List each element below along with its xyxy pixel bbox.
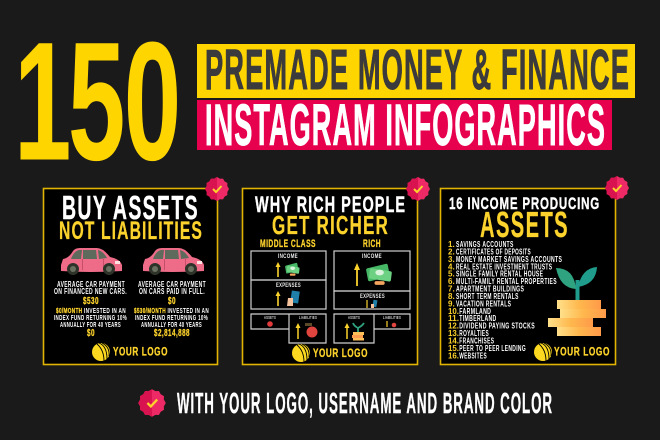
list of assets: 7. bbox=[448, 284, 455, 294]
panel title bbox=[59, 189, 203, 245]
icon: badge one bbox=[205, 177, 229, 201]
text: paid in full column: INDEX FUND RETURNING 10% bbox=[135, 315, 208, 322]
chart: middle class assets and liabilities bbox=[251, 314, 326, 343]
logo bbox=[292, 344, 368, 362]
panel title: WHY RICH PEOPLE bbox=[255, 192, 406, 217]
chart: rich income and expenses: EXPENSES bbox=[360, 293, 385, 300]
panel: why rich people get richer bbox=[242, 188, 418, 364]
logo: YOUR LOGO bbox=[313, 348, 368, 360]
text: financed car column: INDEX FUND RETURNING 10% bbox=[54, 315, 127, 322]
chart: middle class income and expenses: INCOME bbox=[278, 253, 298, 260]
list of assets: 6. bbox=[448, 277, 455, 286]
list of assets: WEBSITES bbox=[459, 351, 487, 360]
text: paid in full column: $530/MONTH INVESTED IN AN bbox=[134, 308, 209, 315]
text: financed car column bbox=[54, 280, 127, 339]
list of assets: CERTIFICATES OF DEPOSITS bbox=[456, 247, 531, 256]
text: financed car column: ANNUALLY FOR 40 YEARS bbox=[60, 322, 121, 329]
list of assets: 15. bbox=[448, 344, 459, 353]
list of assets: DIVIDEND PAYING STOCKS bbox=[459, 322, 535, 331]
chart: middle class income and expenses bbox=[251, 251, 326, 309]
text: paid in full column: $0 bbox=[168, 296, 176, 307]
text: paid in full column: ON CARS PAID IN FULL. bbox=[139, 287, 205, 296]
text: financed car column: $530 bbox=[83, 296, 99, 307]
list of assets: 2. bbox=[448, 247, 455, 256]
list of assets: 9. bbox=[448, 299, 455, 308]
list of assets: ROYALTIES bbox=[459, 329, 489, 338]
icon: plant growing from coins bbox=[548, 267, 606, 336]
chart: rich income and expenses: INCOME bbox=[362, 253, 382, 260]
list of assets: 11. bbox=[448, 314, 459, 323]
list of assets: 12. bbox=[448, 322, 459, 331]
text: paid in full column: $2,814,888 bbox=[154, 328, 190, 339]
text: financed car column: $0 bbox=[87, 328, 95, 339]
icon: badge three bbox=[605, 176, 629, 200]
list of assets: MONEY MARKET SAVINGS ACCOUNTS bbox=[456, 255, 562, 264]
text: paid in full column: ANNUALLY FOR 40 YEARS bbox=[141, 322, 202, 329]
list of assets: SHORT TERM RENTALS bbox=[456, 292, 519, 301]
list of assets: VACATION RENTALS bbox=[456, 299, 511, 308]
list of assets: 4. bbox=[448, 262, 455, 271]
icon: car left bbox=[61, 248, 122, 275]
list of assets: 10. bbox=[448, 307, 459, 316]
chart: middle class assets and liabilities: LIABILITIES bbox=[299, 315, 317, 320]
logo bbox=[92, 343, 168, 361]
list of assets: 16. bbox=[448, 351, 459, 360]
logo bbox=[534, 343, 610, 361]
list of assets: PEER TO PEER LENDING bbox=[459, 344, 526, 353]
panel title: BUY ASSETS bbox=[62, 189, 199, 226]
panel title bbox=[449, 194, 600, 245]
chart: rich income and expenses bbox=[334, 251, 410, 309]
text: financed car column: $0/MONTH INVESTED IN AN bbox=[56, 308, 126, 315]
logo: YOUR LOGO bbox=[554, 346, 610, 358]
big number 150: 150 bbox=[14, 6, 181, 196]
list of assets: 14. bbox=[448, 336, 459, 346]
list of assets: 3. bbox=[448, 255, 455, 264]
list of assets: SAVINGS ACCOUNTS bbox=[456, 240, 514, 249]
list of assets: 1. bbox=[448, 240, 455, 249]
chart: rich assets and liabilities: LIABILITIES bbox=[383, 315, 401, 320]
list of assets: FRANCHISES bbox=[459, 336, 494, 346]
panel title: GET RICHER bbox=[272, 210, 389, 240]
icon: car right bbox=[143, 248, 204, 275]
chart: middle class assets and liabilities: ASSETS bbox=[264, 315, 276, 320]
text: financed car column: ON FINANCED NEW CARS. bbox=[54, 287, 127, 296]
panel title bbox=[255, 192, 406, 240]
list of assets: TIMBERLAND bbox=[459, 314, 497, 323]
panel: buy assets not liabilities bbox=[44, 188, 218, 364]
text: paid in full column bbox=[134, 280, 209, 339]
chart: middle class income and expenses: EXPENSES bbox=[276, 282, 301, 289]
list of assets: REAL ESTATE INVESTMENT TRUSTS bbox=[456, 262, 552, 271]
text: financed car column: AVERAGE CAR PAYMENT bbox=[57, 280, 125, 289]
column heading: rich: RICH bbox=[363, 238, 381, 250]
chart: rich assets and liabilities bbox=[334, 314, 410, 343]
icon: badge two bbox=[406, 177, 430, 201]
panel title: NOT LIABILITIES bbox=[59, 217, 203, 245]
list of assets: 5. bbox=[448, 270, 455, 279]
chart: rich assets and liabilities: ASSETS bbox=[348, 315, 360, 320]
text: paid in full column: AVERAGE CAR PAYMENT bbox=[138, 280, 206, 289]
panel: 16 income producing assets bbox=[440, 188, 616, 364]
panel title: ASSETS bbox=[480, 204, 569, 245]
logo: YOUR LOGO bbox=[113, 346, 168, 358]
list of assets bbox=[448, 240, 562, 360]
list of assets: 8. bbox=[448, 292, 455, 301]
list of assets: MULTI-FAMILY RENTAL PROPERTIES bbox=[456, 277, 557, 286]
list of assets: FARMLAND bbox=[459, 307, 491, 316]
column heading: middle class: MIDDLE CLASS bbox=[260, 238, 316, 250]
list of assets: 13. bbox=[448, 329, 459, 338]
list of assets: APARTMENT BUILDINGS bbox=[456, 284, 524, 294]
icon: footer badge bbox=[138, 389, 166, 417]
list of assets: SINGLE FAMILY RENTAL HOUSE bbox=[456, 270, 543, 279]
